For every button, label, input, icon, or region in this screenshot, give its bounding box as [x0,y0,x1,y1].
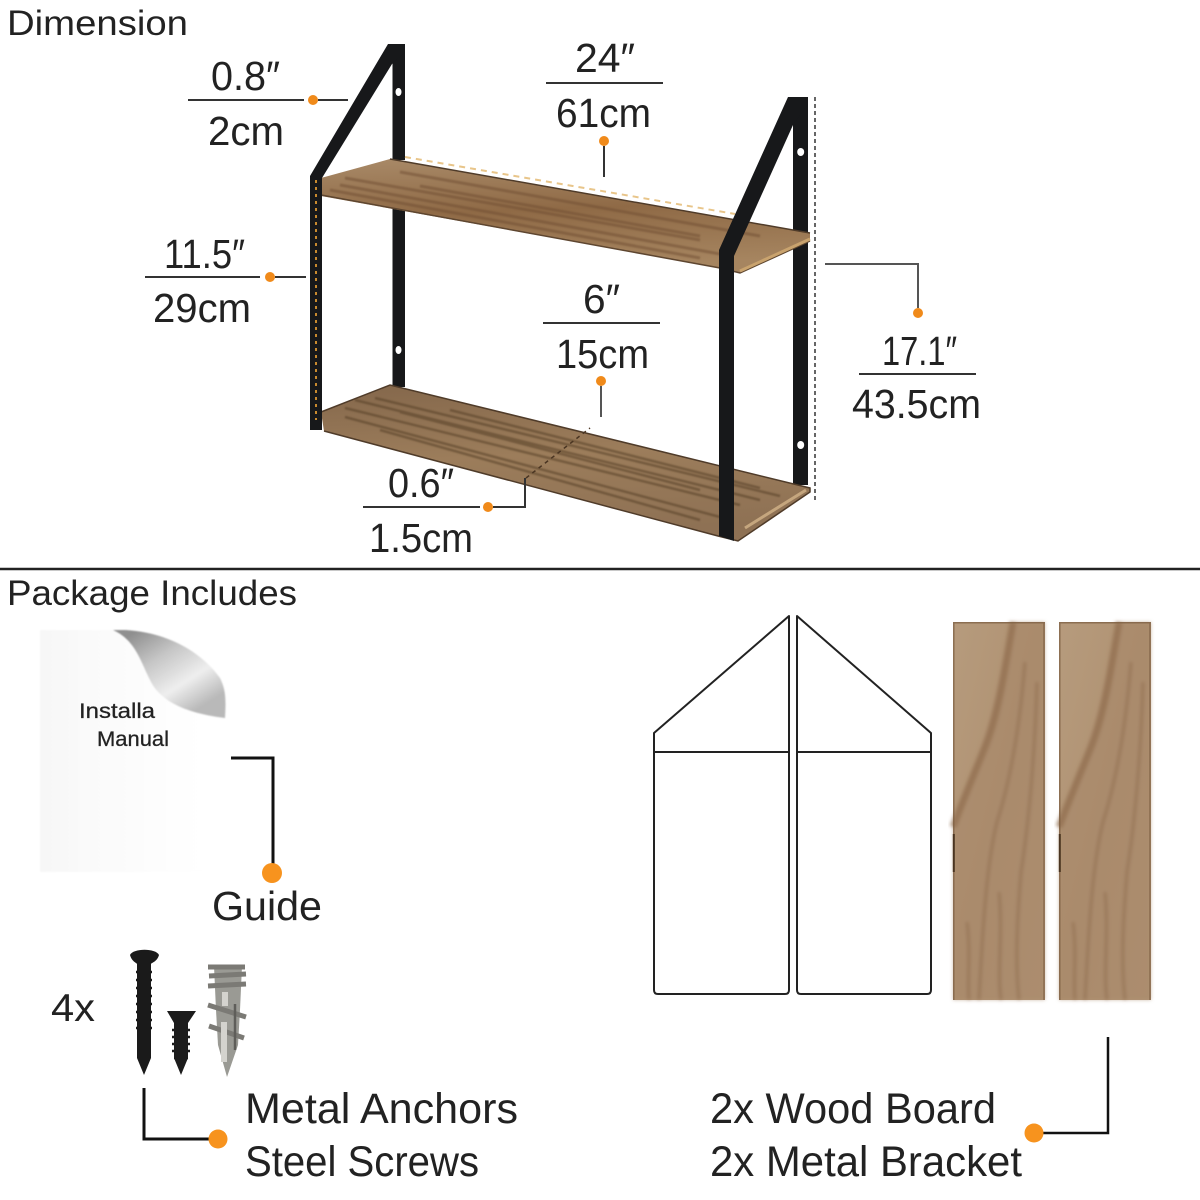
callout: total height [825,264,981,427]
top wood shelf [321,157,810,273]
hardware callout: Metal Anchors [245,1085,518,1133]
lower wood shelf [321,385,810,541]
hardware callout [144,1085,518,1186]
icon: long screw [130,950,159,1075]
quantity: 4x: 4x [51,987,96,1030]
callout: shelf depth [543,276,660,417]
callout: bracket width [188,53,348,154]
callout: shelf length [546,35,663,177]
callout: shelf depth: 15cm [556,331,649,377]
back right bracket [793,97,808,485]
installation manual: Manual [97,728,169,751]
mounting holes [396,88,804,449]
icon: short screw [167,1011,196,1075]
height dotted line [315,180,317,420]
callout: total height: 43.5cm [852,381,981,427]
callout: shelf spacing: 11.5″ [164,231,245,277]
callout: board thickness: 1.5cm [369,515,473,561]
callout: bracket width: 2cm [208,108,284,154]
section: package includes [7,574,1151,1186]
callout: shelf length: 24″ [575,35,635,81]
section divider [0,568,1200,570]
front left bracket [310,44,405,430]
callout: shelf depth: 6″ [583,276,620,322]
installation manual [40,630,225,872]
overall height dashed line [814,97,816,500]
icon: metal anchor [208,966,246,1077]
front right bracket [719,97,808,541]
guide callout: Guide [212,883,322,929]
parts callout: 2x Wood Board [710,1085,996,1133]
heading: Package Includes: Package Includes [7,574,297,613]
heading: Dimension: Dimension [7,4,188,43]
back left bracket [392,45,405,387]
callout: shelf spacing [145,231,306,331]
shelf illustration [310,44,815,541]
callout: board thickness [363,460,525,561]
callout: shelf length: 61cm [556,90,651,136]
callout: shelf spacing: 29cm [153,285,251,331]
installation manual: Installa [79,700,155,723]
metal bracket outlines [654,616,931,994]
parts callout: 2x Metal Bracket [710,1138,1022,1186]
callout: board thickness: 0.6″ [388,460,454,506]
hardware callout: Steel Screws [245,1138,479,1186]
callout: total height: 17.1″ [882,328,957,374]
guide callout [212,758,322,929]
parts callout [710,1037,1108,1186]
section: dimension [7,4,981,561]
wood boards [953,622,1151,1000]
callout: bracket width: 0.8″ [211,53,280,99]
